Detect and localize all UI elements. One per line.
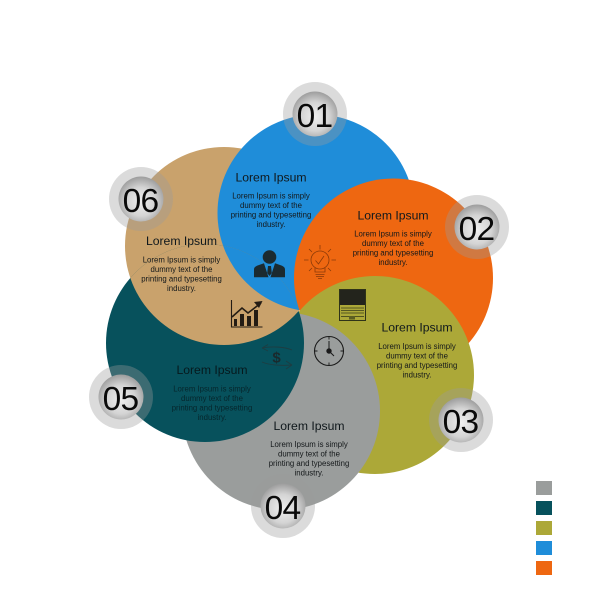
circle: tan segment 06 (125, 147, 323, 345)
text block: segment 01: Lorem Ipsum (235, 170, 307, 184)
icon: growth chart (232, 300, 262, 327)
badge: 06: 06 (123, 183, 158, 220)
circle: blue segment 01 (218, 114, 414, 312)
badge: 06 (109, 167, 173, 231)
text block: segment 02: dummy text of the (362, 239, 424, 248)
circle: teal segment 05 (106, 244, 304, 442)
badge: 03: 03 (443, 404, 478, 441)
text block: segment 06: Lorem Ipsum (146, 234, 217, 248)
text block: segment 02 (353, 208, 433, 267)
circle: tan overlap on teal (130, 244, 298, 345)
badge: 01 (283, 82, 347, 146)
text block: segment 05: industry. (198, 413, 226, 422)
text block: segment 03: printing and typesetting (377, 361, 457, 370)
badge: 03 (429, 388, 493, 452)
text block: segment 04: industry. (295, 468, 323, 478)
icon: clock (314, 336, 344, 366)
text block: segment 06: dummy text of the (151, 265, 212, 274)
text block: segment 04: Lorem Ipsum (273, 419, 345, 433)
icon: businessman (254, 250, 285, 277)
icon: dollar exchange arrows (262, 344, 292, 369)
badge: 04: 04 (265, 490, 300, 527)
text block: segment 05: Lorem Ipsum (176, 363, 248, 377)
circle: orange segment 02 (294, 178, 493, 378)
text block: segment 03 (377, 320, 457, 380)
text block: segment 04: dummy text of the (278, 450, 340, 458)
circle: olive segment 03 (276, 276, 474, 474)
text block: segment 02: industry. (379, 258, 407, 267)
badge: 05: 05 (103, 381, 138, 418)
text block: segment 02: Lorem Ipsum (357, 208, 429, 222)
text block: segment 06 (141, 234, 222, 293)
icon: dollar exchange arrows: $ (272, 350, 281, 366)
text block: segment 01 (231, 170, 311, 229)
badge: 02: 02 (459, 211, 494, 248)
icon: laptop (340, 290, 366, 320)
text block: segment 05: printing and typesetting (172, 404, 252, 412)
text block: segment 03: Lorem Ipsum (381, 320, 453, 334)
icon: light bulb (304, 245, 336, 278)
badge: 04 (251, 474, 315, 538)
text block: segment 05: Lorem Ipsum is simply (173, 384, 251, 394)
badge: 05 (89, 365, 153, 429)
text block: segment 01: dummy text of the (240, 201, 302, 210)
text block: segment 02: Lorem Ipsum is simply (354, 229, 432, 238)
text block: segment 06: printing and typesetting (141, 274, 222, 283)
text block: segment 05 (172, 363, 252, 422)
badge: 01: 01 (297, 98, 332, 135)
text block: segment 04 (269, 419, 349, 478)
text block: segment 02: printing and typesetting (353, 248, 433, 257)
text block: segment 01: printing and typesetting (231, 210, 311, 219)
badge: 02 (445, 195, 509, 259)
text block: segment 01: industry. (257, 220, 285, 229)
text block: segment 03: industry. (403, 370, 431, 380)
text block: segment 06: industry. (167, 284, 196, 293)
text block: segment 05: dummy text of the (181, 394, 243, 403)
circle: gray segment 04 (182, 312, 380, 510)
text block: segment 06: Lorem Ipsum is simply (143, 255, 220, 264)
circle: blue overlap restored above tan (223, 246, 298, 310)
legend: colour swatches (536, 481, 552, 575)
text block: segment 01: Lorem Ipsum is simply (232, 191, 310, 200)
text block: segment 04: Lorem Ipsum is simply (270, 440, 348, 449)
text block: segment 03: dummy text of the (386, 352, 448, 360)
text block: segment 04: printing and typesetting (269, 459, 349, 468)
text block: segment 03: Lorem Ipsum is simply (378, 342, 456, 351)
